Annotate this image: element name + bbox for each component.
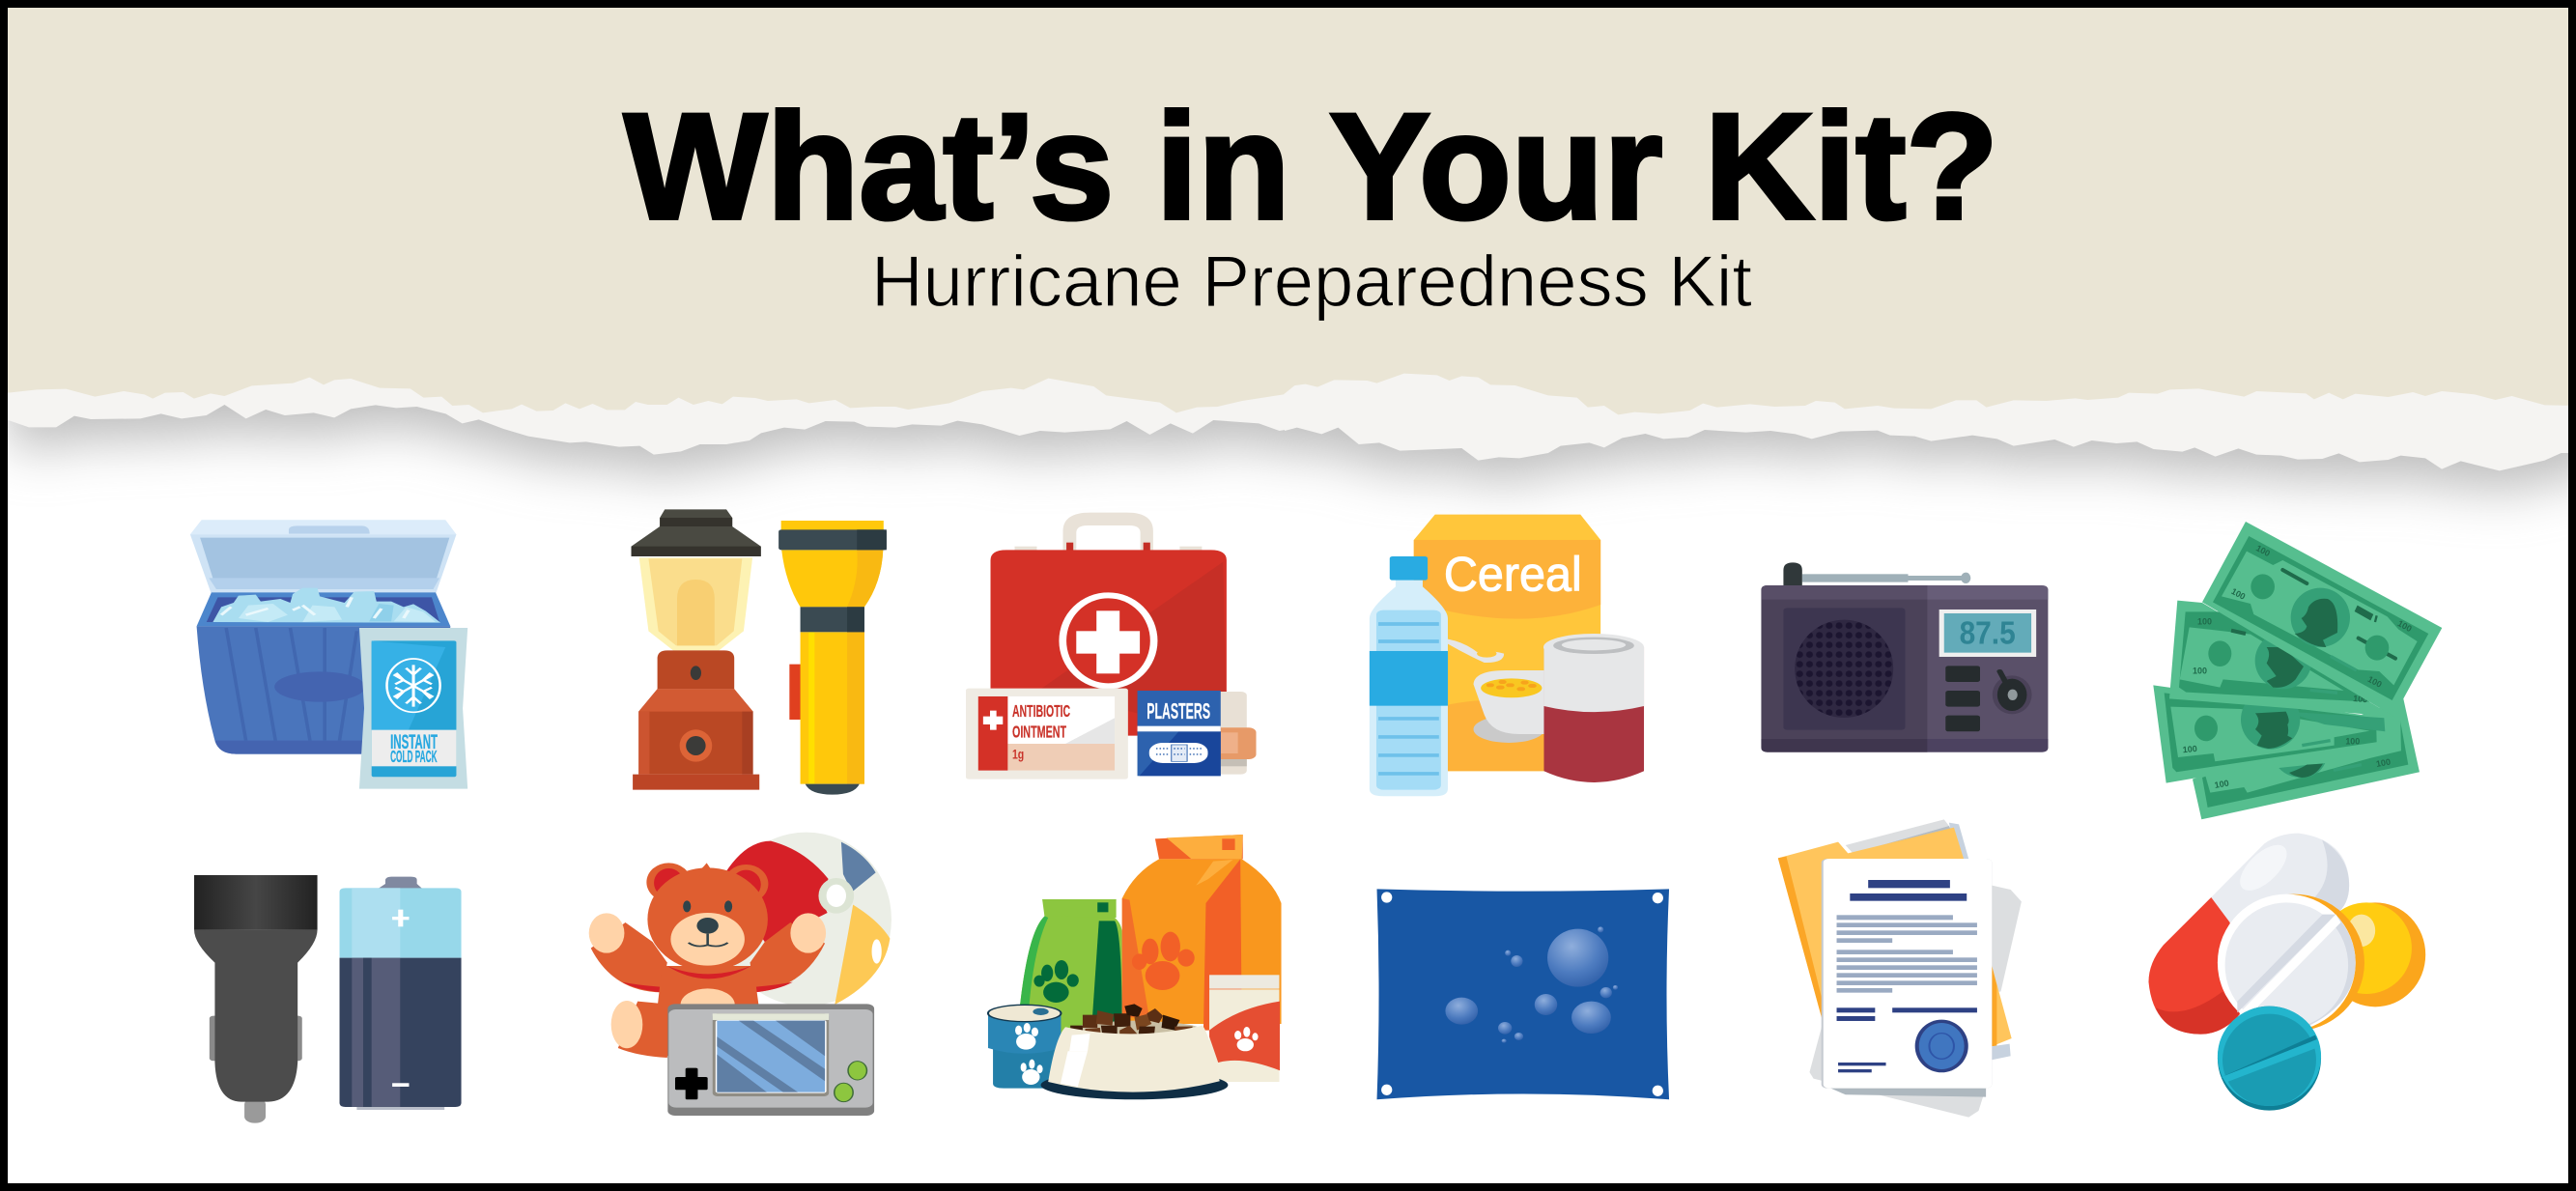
beige header band [0, 0, 2576, 414]
icon: battery [340, 877, 462, 1110]
icon: stack of dollar bills [2153, 522, 2442, 819]
icon: instant cold pack: COLD PACK [390, 748, 438, 766]
paper shadow [0, 21, 2576, 492]
icon: pet food cans [988, 1005, 1061, 1089]
fourth bill: 100 [2375, 756, 2392, 769]
icon: antibiotic ointment packet [966, 689, 1128, 780]
torn paper header [0, 0, 2576, 492]
icon: orange pet food bag [1122, 835, 1282, 1031]
icon: soup can [1543, 634, 1644, 782]
second bill [2169, 601, 2393, 717]
icon: water bottle [1370, 556, 1448, 796]
top bill: 100 [2254, 543, 2272, 558]
icon: portable radio [1761, 562, 2048, 752]
icon: handheld game console [667, 1004, 874, 1116]
icon: antibiotic ointment packet: ANTIBIOTIC [1012, 701, 1070, 721]
top bill: 100 [2366, 674, 2384, 690]
icon: supplement bottle [1209, 975, 1280, 1082]
icon: documents and folder [1778, 819, 2022, 1118]
icon: first aid kit [991, 513, 1227, 736]
top bill: 100 [2229, 586, 2247, 602]
torn white paper layer [0, 0, 2576, 470]
subtitle: Hurricane Preparedness Kit [871, 241, 1752, 322]
fourth bill: 100 [2214, 778, 2229, 790]
icon: instant cold pack [359, 628, 467, 789]
second bill: 100 [2197, 617, 2212, 627]
icon: flashlight [778, 521, 887, 795]
top bill: 100 [2396, 618, 2414, 634]
icon: cereal box [1414, 515, 1600, 771]
icon: beach ball [721, 833, 892, 1007]
icon: teddy bear [589, 863, 826, 1058]
third bill: 100 [2345, 737, 2360, 747]
fourth bill [2193, 698, 2420, 819]
third bill [2153, 685, 2385, 783]
second bill: 100 [2353, 694, 2368, 704]
icon: antibiotic ointment packet: OINTMENT [1012, 722, 1066, 742]
top bill [2202, 522, 2442, 717]
icon: ice cooler [190, 520, 456, 754]
icon: antibiotic ointment packet: 1g [1012, 747, 1024, 762]
icon: pet food bowl [1041, 1004, 1228, 1099]
icon: pills and capsule [2148, 834, 2425, 1111]
title: What’s in Your Kit? [624, 83, 1998, 251]
icon: green pet food bag [1020, 899, 1122, 1043]
icon: bandage roll [1213, 692, 1257, 775]
icon: car charger [194, 875, 318, 1123]
icon: plasters box [1138, 691, 1221, 776]
infographic canvas: PLASTERS [1146, 699, 1210, 723]
third bill: 100 [2182, 744, 2197, 754]
second bill: 100 [2193, 666, 2207, 676]
icon: cereal box: Cereal [1444, 547, 1582, 601]
icon: portable radio: 87.5 [1960, 615, 2016, 651]
icon: camping lantern [632, 509, 761, 790]
icon: instant cold pack: INSTANT [390, 730, 438, 753]
icon: blue tarp [1377, 889, 1669, 1099]
